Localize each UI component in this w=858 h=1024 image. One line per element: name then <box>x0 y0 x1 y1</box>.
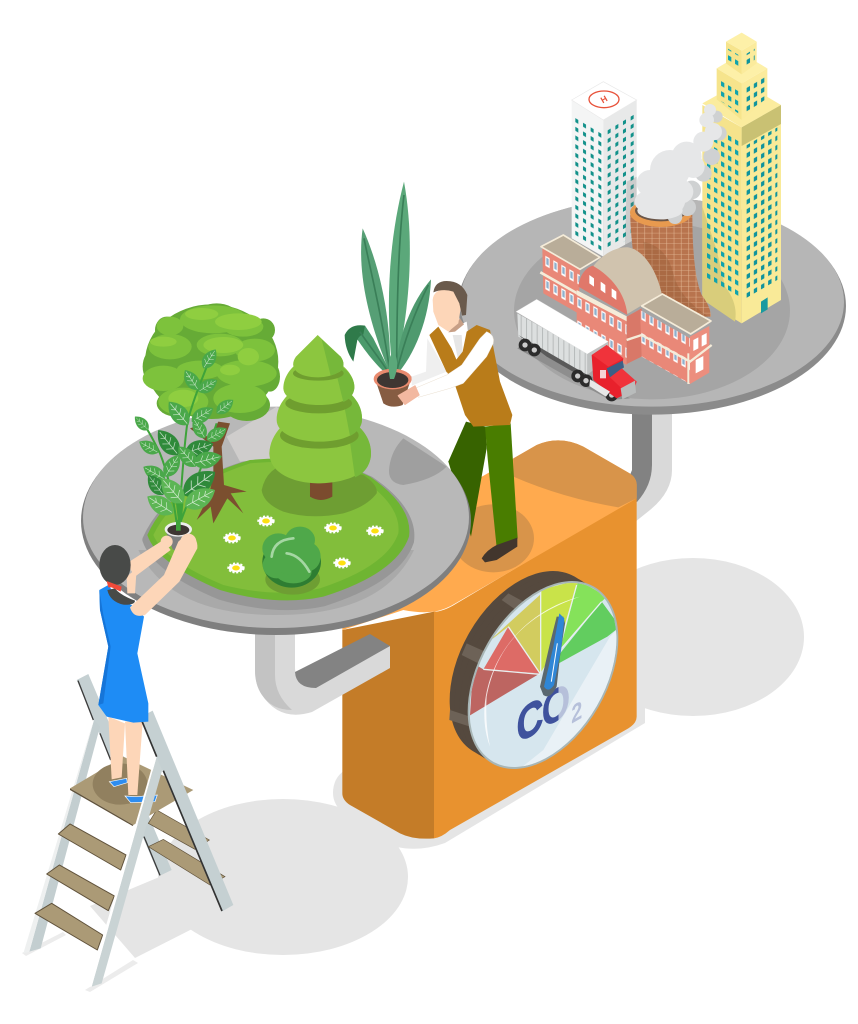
truck <box>516 299 637 401</box>
ladder platform <box>70 757 193 826</box>
shoes <box>109 778 157 803</box>
lawn <box>147 459 409 600</box>
body right face <box>434 498 637 838</box>
left front rail <box>23 720 100 953</box>
gauge housing <box>419 545 644 792</box>
deciduous tree <box>143 303 280 523</box>
woman's arms <box>127 534 197 616</box>
red brick building <box>540 235 712 384</box>
pan <box>81 407 471 635</box>
white skyscraper with helipad: H <box>599 93 609 105</box>
right scale pan: city <box>458 33 846 415</box>
gauge sectors <box>470 580 620 715</box>
conifer <box>269 335 371 500</box>
woman's legs <box>108 717 143 795</box>
right stem <box>628 405 672 526</box>
head <box>433 281 467 332</box>
cooling tower <box>630 198 711 317</box>
pot <box>165 520 192 551</box>
trunk and roots <box>190 422 247 523</box>
gauge <box>449 571 618 769</box>
CO2 label: C <box>517 686 543 755</box>
man's shadow on pan <box>389 438 447 485</box>
yellow skyscraper <box>702 33 781 323</box>
cabbage bush <box>262 527 321 595</box>
shadow on top face <box>513 440 637 507</box>
foliage <box>143 303 280 421</box>
tree's shadow on pan <box>227 407 303 462</box>
pan <box>458 197 846 415</box>
left stem and arm <box>255 625 390 715</box>
body left face <box>342 612 434 839</box>
man's shadow on scale <box>453 504 534 572</box>
gauge needle <box>540 613 565 696</box>
white skyscraper with helipad <box>572 82 637 257</box>
daisies <box>224 517 382 572</box>
smoke plume <box>635 104 727 224</box>
body top face <box>342 440 637 630</box>
lower back steps <box>148 810 225 885</box>
gauge face <box>470 583 616 767</box>
ladder and woman <box>23 534 233 987</box>
glass highlight <box>484 597 580 747</box>
floor shadows <box>22 558 804 992</box>
CO2 scale body <box>342 440 649 839</box>
front ladder rails <box>88 711 233 987</box>
left scale pan: nature <box>81 303 471 635</box>
rear sleeve and shirt <box>412 322 468 386</box>
hands <box>398 386 419 404</box>
trousers <box>448 422 518 548</box>
hair bow <box>107 581 122 592</box>
potted plant <box>345 182 431 407</box>
front sleeve <box>415 332 494 397</box>
woman's hair <box>99 545 135 605</box>
rear ladder rail <box>77 674 172 876</box>
CO2 label: 2 <box>571 695 582 730</box>
blue dress <box>98 585 148 723</box>
shoes <box>482 538 517 562</box>
CO2 label <box>517 663 582 762</box>
CO2 label: O <box>542 670 570 740</box>
vest <box>429 325 512 427</box>
front steps <box>35 824 126 950</box>
potted plant held by woman <box>131 346 237 551</box>
man holding plant <box>345 182 518 562</box>
